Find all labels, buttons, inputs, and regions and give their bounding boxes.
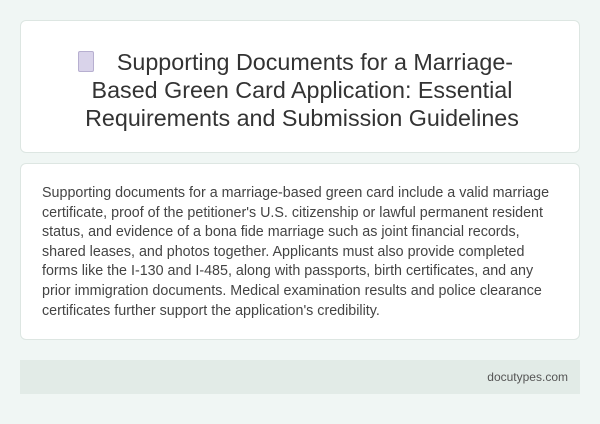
icon: document	[78, 51, 94, 72]
description card	[20, 163, 580, 340]
footer bar	[20, 360, 580, 394]
title: Supporting Documents for a Marriage-Based Green Card Application: Essential Requirements and Submission Guidelines	[85, 49, 519, 131]
footer text: docutypes.com	[487, 370, 568, 384]
title card	[20, 20, 580, 153]
description text: Supporting documents for a marriage-based green card include a valid marriage certificate, proof of the petitioner's U.S. citizenship or lawful permanent resident status, and evidence of a bona fide marriage such as joint financial records, shared leases, and photos together. Applicants must also provide completed forms like the I-130 and I-485, along with passports, birth certificates, and any prior immigration documents. Medical examination results and police clearance certificates further support the application's credibility.	[42, 185, 549, 319]
